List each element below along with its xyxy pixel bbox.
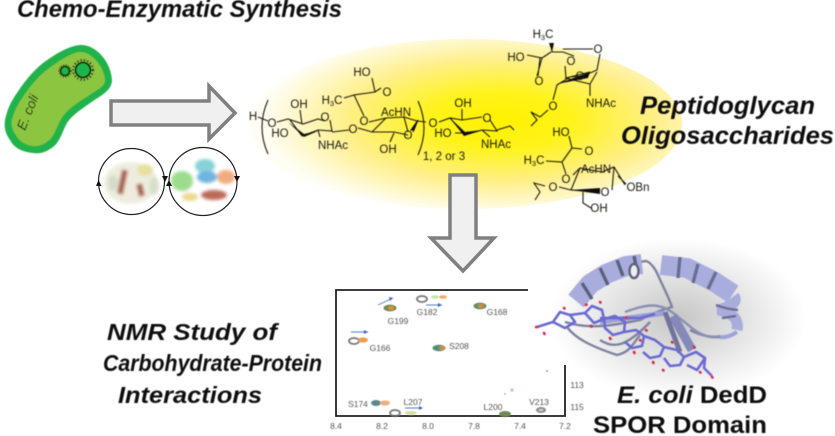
chemical structure: reducing end sugar: OBn bbox=[626, 182, 650, 194]
heading: NMR study: Interactions bbox=[118, 382, 262, 408]
NMR spectrum: L200 bbox=[484, 402, 503, 412]
heading: NMR study: NMR Study of bbox=[107, 319, 279, 345]
NMR spectrum: 8.4 bbox=[330, 421, 342, 431]
chemical structure: anhydro sugar: 3 bbox=[541, 33, 545, 42]
NMR spectrum: S208 bbox=[449, 341, 469, 351]
protein ribbon structure bbox=[565, 256, 738, 355]
NMR spectrum bbox=[330, 290, 584, 431]
chemical structure: reducing end sugar: HO bbox=[552, 127, 570, 139]
heading: E. coli DedD SPOR Domain: E. coli DedD bbox=[617, 382, 767, 409]
chemical structure: repeating unit: O bbox=[404, 130, 413, 142]
chemical structure: anhydro sugar: O bbox=[594, 44, 603, 56]
icon: enzyme cycle right bbox=[166, 148, 240, 216]
chemical structure: reducing end sugar: O bbox=[549, 182, 558, 194]
chemical structure: repeating unit: O bbox=[349, 124, 358, 136]
heading: NMR study bbox=[103, 319, 322, 408]
heading: Peptidoglycan Oligosaccharides: Oligosaccharides bbox=[621, 122, 834, 150]
NMR spectrum: G182 bbox=[417, 307, 438, 317]
chemical structure: anhydro sugar: C bbox=[545, 29, 553, 41]
NMR spectrum: L207 bbox=[404, 397, 423, 407]
chemical structure: repeating unit: OH bbox=[454, 98, 472, 110]
arrow: down bbox=[431, 175, 494, 271]
chemical structure: reducing end sugar: AcHN bbox=[581, 164, 611, 176]
chemical structure: reducing end sugar: O bbox=[601, 187, 610, 199]
chemical structure: reducing end sugar: OH bbox=[590, 203, 608, 215]
chemical structure: reducing end sugar: 3 bbox=[532, 159, 536, 168]
chemical structure: repeating unit: H bbox=[249, 111, 257, 123]
icon: E. coli cell bbox=[5, 45, 112, 153]
chemical structure: anhydro sugar: H bbox=[533, 29, 541, 41]
NMR spectrum: G199 bbox=[388, 316, 409, 326]
NMR spectrum: V213 bbox=[529, 397, 549, 407]
chemical structure: repeating unit bbox=[249, 67, 514, 163]
ligand sticks bbox=[536, 302, 712, 378]
heading: E. coli DedD SPOR Domain bbox=[593, 382, 767, 436]
chemical structure: anhydro sugar bbox=[507, 29, 616, 126]
chemical structure: anhydro sugar: NHAc bbox=[586, 98, 616, 110]
chemical structure: reducing end sugar bbox=[524, 127, 650, 215]
chemical structure: repeating unit: HO bbox=[434, 128, 452, 140]
chemical structure: repeating unit: HO bbox=[271, 128, 289, 140]
protein backdrop glow bbox=[550, 238, 806, 398]
heading: Peptidoglycan Oligosaccharides: Peptidoglycan bbox=[640, 92, 815, 120]
chemical structure: anhydro sugar: O bbox=[535, 76, 544, 88]
chemical structure: repeating unit: C bbox=[334, 95, 342, 107]
NMR spectrum: S174 bbox=[348, 399, 368, 409]
chemical structure: repeating unit: O bbox=[321, 112, 330, 124]
chemical structure: anhydro sugar: O bbox=[567, 56, 576, 68]
NMR spectrum: 7.2 bbox=[559, 421, 571, 431]
chemical structure: repeating unit: AcHN bbox=[381, 107, 411, 119]
chemical structure: reducing end sugar: O bbox=[562, 174, 571, 186]
chemical structure: repeating unit: 1, 2 or 3 bbox=[423, 151, 465, 163]
NMR spectrum: 113 bbox=[570, 380, 584, 390]
chemical structure: repeating unit: OH bbox=[379, 144, 397, 156]
chemical structure: repeating unit: O bbox=[429, 118, 438, 130]
NMR spectrum: 7.4 bbox=[514, 421, 526, 431]
NMR spectrum: 7.8 bbox=[468, 421, 480, 431]
icon: enzyme cycle left bbox=[96, 148, 168, 214]
NMR spectrum: 115 bbox=[570, 402, 584, 412]
NMR spectrum: G166 bbox=[370, 343, 391, 353]
chemical structure: repeating unit: O bbox=[360, 116, 369, 128]
chemical structure: repeating unit: O bbox=[268, 118, 277, 130]
heading: Peptidoglycan Oligosaccharides bbox=[621, 92, 834, 150]
NMR spectrum: 8.2 bbox=[376, 421, 388, 431]
chemical structure: repeating unit: OH bbox=[290, 99, 308, 111]
NMR spectrum: G168 bbox=[487, 307, 508, 317]
chemical structure: reducing end sugar: O bbox=[585, 146, 594, 158]
chemical structure: reducing end sugar: H bbox=[524, 155, 532, 167]
chemical structure: repeating unit: O bbox=[383, 87, 392, 99]
chemical structure: repeating unit: H bbox=[322, 95, 330, 107]
chemical structure: repeating unit: NHAc bbox=[481, 139, 511, 151]
chemical structure: repeating unit: HO bbox=[353, 67, 371, 79]
chemical structure: reducing end sugar: C bbox=[536, 155, 544, 167]
NMR spectrum: 8.0 bbox=[422, 421, 434, 431]
chemical structure: repeating unit: O bbox=[483, 113, 492, 125]
chemical structure: anhydro sugar: O bbox=[576, 71, 585, 83]
heading: NMR study: Carbohydrate-Protein bbox=[103, 350, 322, 376]
chemical structure: anhydro sugar: HO bbox=[507, 52, 525, 64]
yellow oligosaccharide glow bbox=[250, 39, 682, 209]
chemical structure: anhydro sugar: O bbox=[549, 101, 558, 113]
icon: E. coli cell: E. coli bbox=[14, 91, 42, 132]
chemical structure: repeating unit: NHAc bbox=[318, 140, 348, 152]
chemical structure: repeating unit: 3 bbox=[330, 99, 334, 108]
arrow: right bbox=[111, 86, 235, 139]
